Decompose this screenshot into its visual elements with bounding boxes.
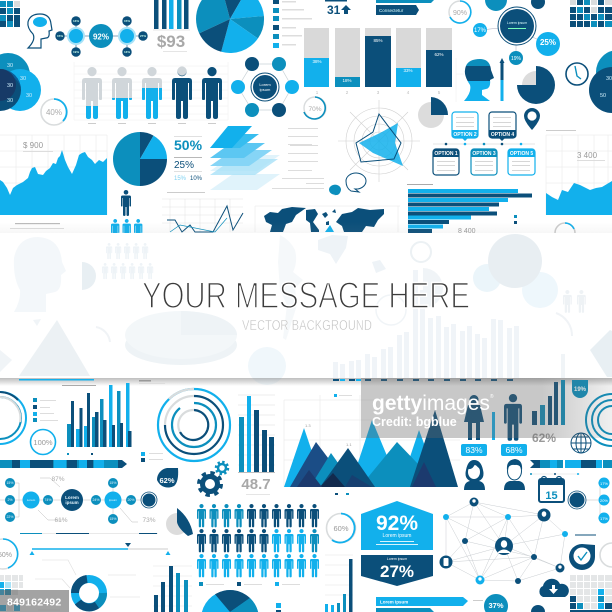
area chart: $900: $ 900 [23,141,44,150]
hexagon stat: 92% [361,501,433,550]
venn diagram: left [0,53,41,111]
icon: male avatar [504,459,525,490]
gauge ring: 70%: 70% [308,106,322,113]
pie: dark with gray slice [517,66,555,104]
hexagon stat: 27%: Lorem ipsum [387,557,407,561]
option cards [433,112,535,175]
stat badges: 83% and 68%: 83% [465,445,483,455]
gauge ring: 60%: 60% [333,524,349,533]
icon: clock [566,63,588,85]
bottom label arrows and 37% [376,594,545,612]
venn diagram: right [589,50,612,113]
network: Lorem ipsum flow row: Lorem [65,495,79,500]
pie chart: bottom centre [202,590,281,612]
network: Lorem ipsum flow row: 2% [7,498,13,502]
icon: shield check drop [569,535,612,570]
bubble cluster: Lorem ipsum 17% 25% 19%: Lorem ipsum [507,21,527,25]
area chart: $900 [0,135,107,229]
gauge ring: 40% [41,99,67,125]
bar chart: 31 and label arrows [325,0,434,17]
stacked columns: percent bars: 38% [312,59,322,64]
network: hexagon with Lorem ipsum hub: Lorem [259,82,271,87]
network: 92% hub: 15% [57,34,63,38]
gauge ring: 60% [326,514,356,542]
network: Lorem ipsum flow row: 24% [92,498,100,502]
area chart: 3 400: 3 400 [577,151,598,160]
gauge ring: 90% [449,1,471,23]
ghost charts behind message [0,234,612,385]
gauge ring: 50% [0,539,18,569]
drop badge: 62%: 62% [159,476,175,485]
horizontal bar chart [407,184,532,235]
text list beside radar [290,128,324,189]
bar chart: bottom centre [153,566,192,612]
drop badge: 62% [157,468,178,488]
stacked columns: percent bars: 3 [377,90,380,95]
network: Lorem ipsum flow row: 20% [127,498,135,502]
timeline bar [20,534,170,555]
tile grid: top right [570,0,612,27]
layered stack diagram [210,126,312,190]
getty watermark: Credit: bgblue [372,415,457,429]
icon: cloud download [539,579,569,597]
bar chart: below 60% [325,555,353,612]
stat badges: 83% and 68%: 68% [505,445,523,455]
network: Lorem ipsum flow row: ipsum [65,500,79,505]
bottom label arrows and 37%: 37% [488,601,504,610]
stacked columns: percent bars: 33% [403,68,413,73]
network: Lorem ipsum flow row: 61% [54,517,68,524]
network: Lorem ipsum flow row: 15% [109,517,117,521]
org diagram: person with three reports [111,190,142,241]
venn diagram: left: 30 [7,83,13,89]
icon: gears [199,462,228,495]
stat block: percentages [174,136,203,182]
subheading: VECTOR BACKGROUND [242,317,372,334]
venn diagram: left: 30 [20,76,26,82]
concentric ring chart [139,380,230,462]
bubble cluster: Lorem ipsum 17% 25% 19% [473,0,560,65]
gauge ring: 100% [30,430,56,454]
donut chart: bottom [35,560,140,610]
hexagon stat: 92%: 92% [376,512,418,535]
mountain chart: 1.3 [305,423,311,428]
venn diagram: left: 30 [26,93,32,99]
getty watermark: ® [490,393,494,400]
bar chart: 48.7 [238,395,275,495]
badge: 19% [572,380,588,398]
network: right branching circles: 17% [600,481,608,486]
stat badges: 83% and 68% [461,444,527,456]
network: hexagon with Lorem ipsum hub [231,57,299,117]
stat block: percentages: 15% [174,176,187,182]
gauge ring: 40%: 40% [46,108,62,117]
network: right branching circles: 17% [600,516,608,521]
people grid [197,504,306,586]
legend: pie swatches [273,0,312,48]
gauge ring: 70% [304,97,326,119]
people pair with bars [464,380,565,441]
tile grid: bottom left [0,575,23,611]
network: 92% hub [55,16,148,57]
stacked columns: percent bars: 18% [342,78,352,83]
network: Lorem ipsum flow row: 74% [44,498,52,502]
gauge ring: 90%: 90% [453,10,467,17]
pie chart: top centre [196,0,264,53]
network: 92% hub: 92% [93,32,109,42]
arrow: vertical pencil [500,58,504,101]
icon: globe [571,433,591,453]
getty watermark [361,378,612,438]
stacked columns: percent bars: 85% [373,38,383,43]
profile head with bands [456,58,494,102]
bar chart: 48.7: 48.7 [241,476,271,493]
network: Lorem ipsum flow row: 73% [142,517,156,524]
stat block: percentages: 50% [174,137,203,153]
icon: head outline with brain [28,14,52,48]
bottom label arrows and 37%: Lorem ipsum [380,600,408,604]
badge: 19%: 19% [574,387,587,393]
venn diagram: right: 30 [606,76,612,82]
tile grid: bottom right [570,575,612,612]
world map [255,206,400,232]
icon: calendar 15 [539,476,564,502]
hexagon stat: 92%: Lorem ipsum [383,533,411,539]
white message band [0,233,612,378]
horizontal bar chart: 8 400 [458,228,476,235]
network: Lorem ipsum flow row: 15% [109,481,117,485]
venn diagram: left: 30 [7,63,13,69]
stacked columns: percent bars: 62% [434,52,444,57]
bar chart: $93 top bars: $93 [157,32,185,51]
ribbon arrow: lower left [0,460,127,468]
bubble cluster: Lorem ipsum 17% 25% 19%: 19% [511,56,522,62]
network: hexagon with Lorem ipsum hub: ipsum [260,87,271,92]
network: 92% hub: 13% [73,19,79,23]
option cards: OPTION 2 [453,132,477,138]
icon: calendar 15: 15 [545,490,558,502]
people chart: five figures [74,62,228,124]
legend: lower left bars [33,398,58,422]
stacked columns: percent bars: 4 [407,90,410,95]
radar chart [338,100,420,182]
bubble cluster: Lorem ipsum 17% 25% 19%: 25% [540,38,556,47]
network: 92% hub: 27% [140,34,146,38]
pie chart: 50% 25% 15% 10% [113,132,167,186]
network: Lorem ipsum flow row: ipsum [109,498,117,502]
map pin icon [524,108,540,130]
venn diagram: right: 50 [600,93,606,99]
speech bubbles [329,173,366,195]
mountain chart: 1.1 [346,442,352,447]
network: Lorem ipsum flow row [0,476,157,524]
bar chart: 31 and label arrows: 31 [327,3,341,17]
image id label: 849162492 [7,596,61,608]
network: Lorem ipsum flow row: 87% [51,476,65,483]
area chart: 3 400 [546,130,612,233]
icon: top-left tile grid [0,1,20,27]
gauge ring: 100%: 100% [33,438,53,447]
stat block: percentages: 10% [190,176,203,182]
people column: right of pie [310,504,319,577]
option cards: OPTION 5 [510,151,533,157]
bubble cluster: Lorem ipsum 17% 25% 19%: 17% [474,28,487,34]
bar chart: grouped bars [62,383,132,455]
venn diagram: left: 30 [7,98,13,104]
stat block: percentages: 25% [174,160,194,171]
network: right branching circles: 20% [600,498,608,503]
donut ring: lower left [0,392,26,444]
bar chart: $93 top bars [153,0,190,52]
ring arcs: right edge [586,394,612,446]
hexagon stat: 27%: 27% [380,562,414,581]
mountain chart [284,394,460,495]
image id label [0,590,69,612]
option cards: OPTION 4 [491,132,514,138]
option cards: OPTION 3 [472,151,496,157]
network graph with people nodes [440,498,568,584]
stacked columns: percent bars: 1 [316,90,319,95]
network: Lorem ipsum flow row: Lorem [27,498,36,502]
network: 92% hub: 13% [124,50,130,54]
option cards: OPTION 1 [434,151,458,157]
small pie: quarter slice [418,97,448,128]
band top fade [0,222,612,233]
network: Lorem ipsum flow row: 15% [6,481,14,485]
stacked columns: percent bars: 2 [346,90,349,95]
stat: 62%: 62% [532,431,556,445]
small pie: lower centre [166,508,193,536]
network: right branching circles [568,478,610,524]
ribbon arrow: lower right [530,460,612,475]
band bottom strip [0,378,612,386]
network: Lorem ipsum flow row: 22% [6,515,14,519]
network: 92% hub: 19% [73,50,79,54]
getty watermark: gettyimages [372,392,490,415]
bar chart: 31 and label arrows: Consectetur [379,8,404,13]
line chart: bottom of upper area [162,192,243,232]
hexagon stat: 27% [361,555,433,586]
headline: YOUR MESSAGE HERE [142,274,470,316]
stacked columns: percent bars: 5 [438,90,441,95]
icon: female avatar [464,460,485,490]
network: 92% hub: 15% [124,19,130,23]
stacked columns: percent bars [304,28,452,95]
